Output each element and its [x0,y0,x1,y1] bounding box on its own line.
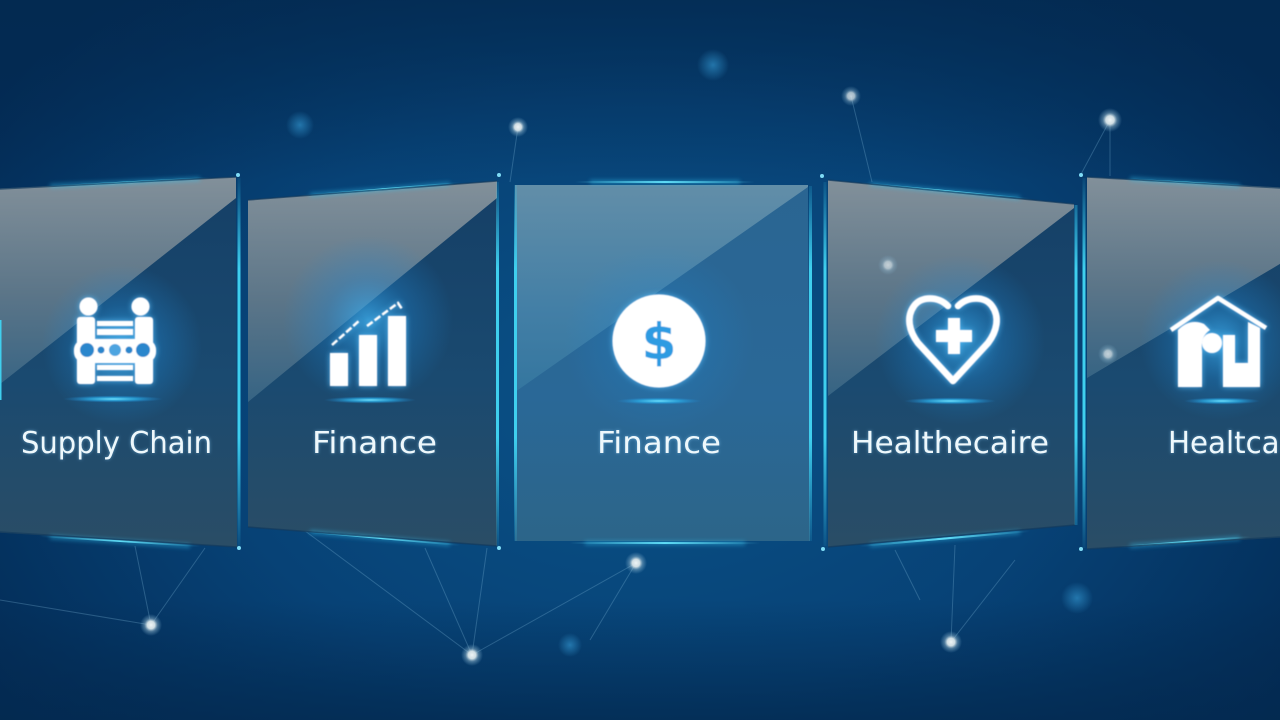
label: Finance [597,426,721,461]
icon underline [1184,398,1260,404]
icon: dollar coin: $ [642,313,676,371]
node behind glass [878,255,898,275]
icon: heart with cross [909,298,997,381]
panel: finance coin [515,185,810,541]
icon glow [52,276,192,416]
icon underline [616,398,702,404]
glass reflection [515,185,808,392]
glass reflection [248,181,497,402]
corner sparks [236,173,1083,551]
glowing panel edges [0,177,1280,549]
glass reflection [1087,177,1280,378]
icon: house [1171,298,1266,387]
panel: supply chain [0,177,237,547]
icon: bar chart [330,303,406,386]
icon glow [594,278,723,398]
icon glow [296,249,443,394]
icon: dollar coin [612,294,706,388]
icon glow [886,270,1035,414]
panel: healthcare heart [828,180,1075,547]
icon: handshake vehicle [74,298,156,384]
icon glow [1150,273,1280,410]
label: Healthecaire [851,426,1049,461]
panel: healthcare house [1087,177,1280,549]
network lines [0,96,1110,655]
network nodes [140,49,1122,666]
icon underline [904,398,996,404]
node behind glass [1098,344,1118,364]
label: Supply Chain [21,426,212,461]
label: Finance [312,426,437,461]
glass reflection [0,177,236,392]
glass reflection [828,180,1074,396]
icon underline [63,396,163,402]
icon underline [324,396,416,404]
panel: finance chart [248,181,497,546]
